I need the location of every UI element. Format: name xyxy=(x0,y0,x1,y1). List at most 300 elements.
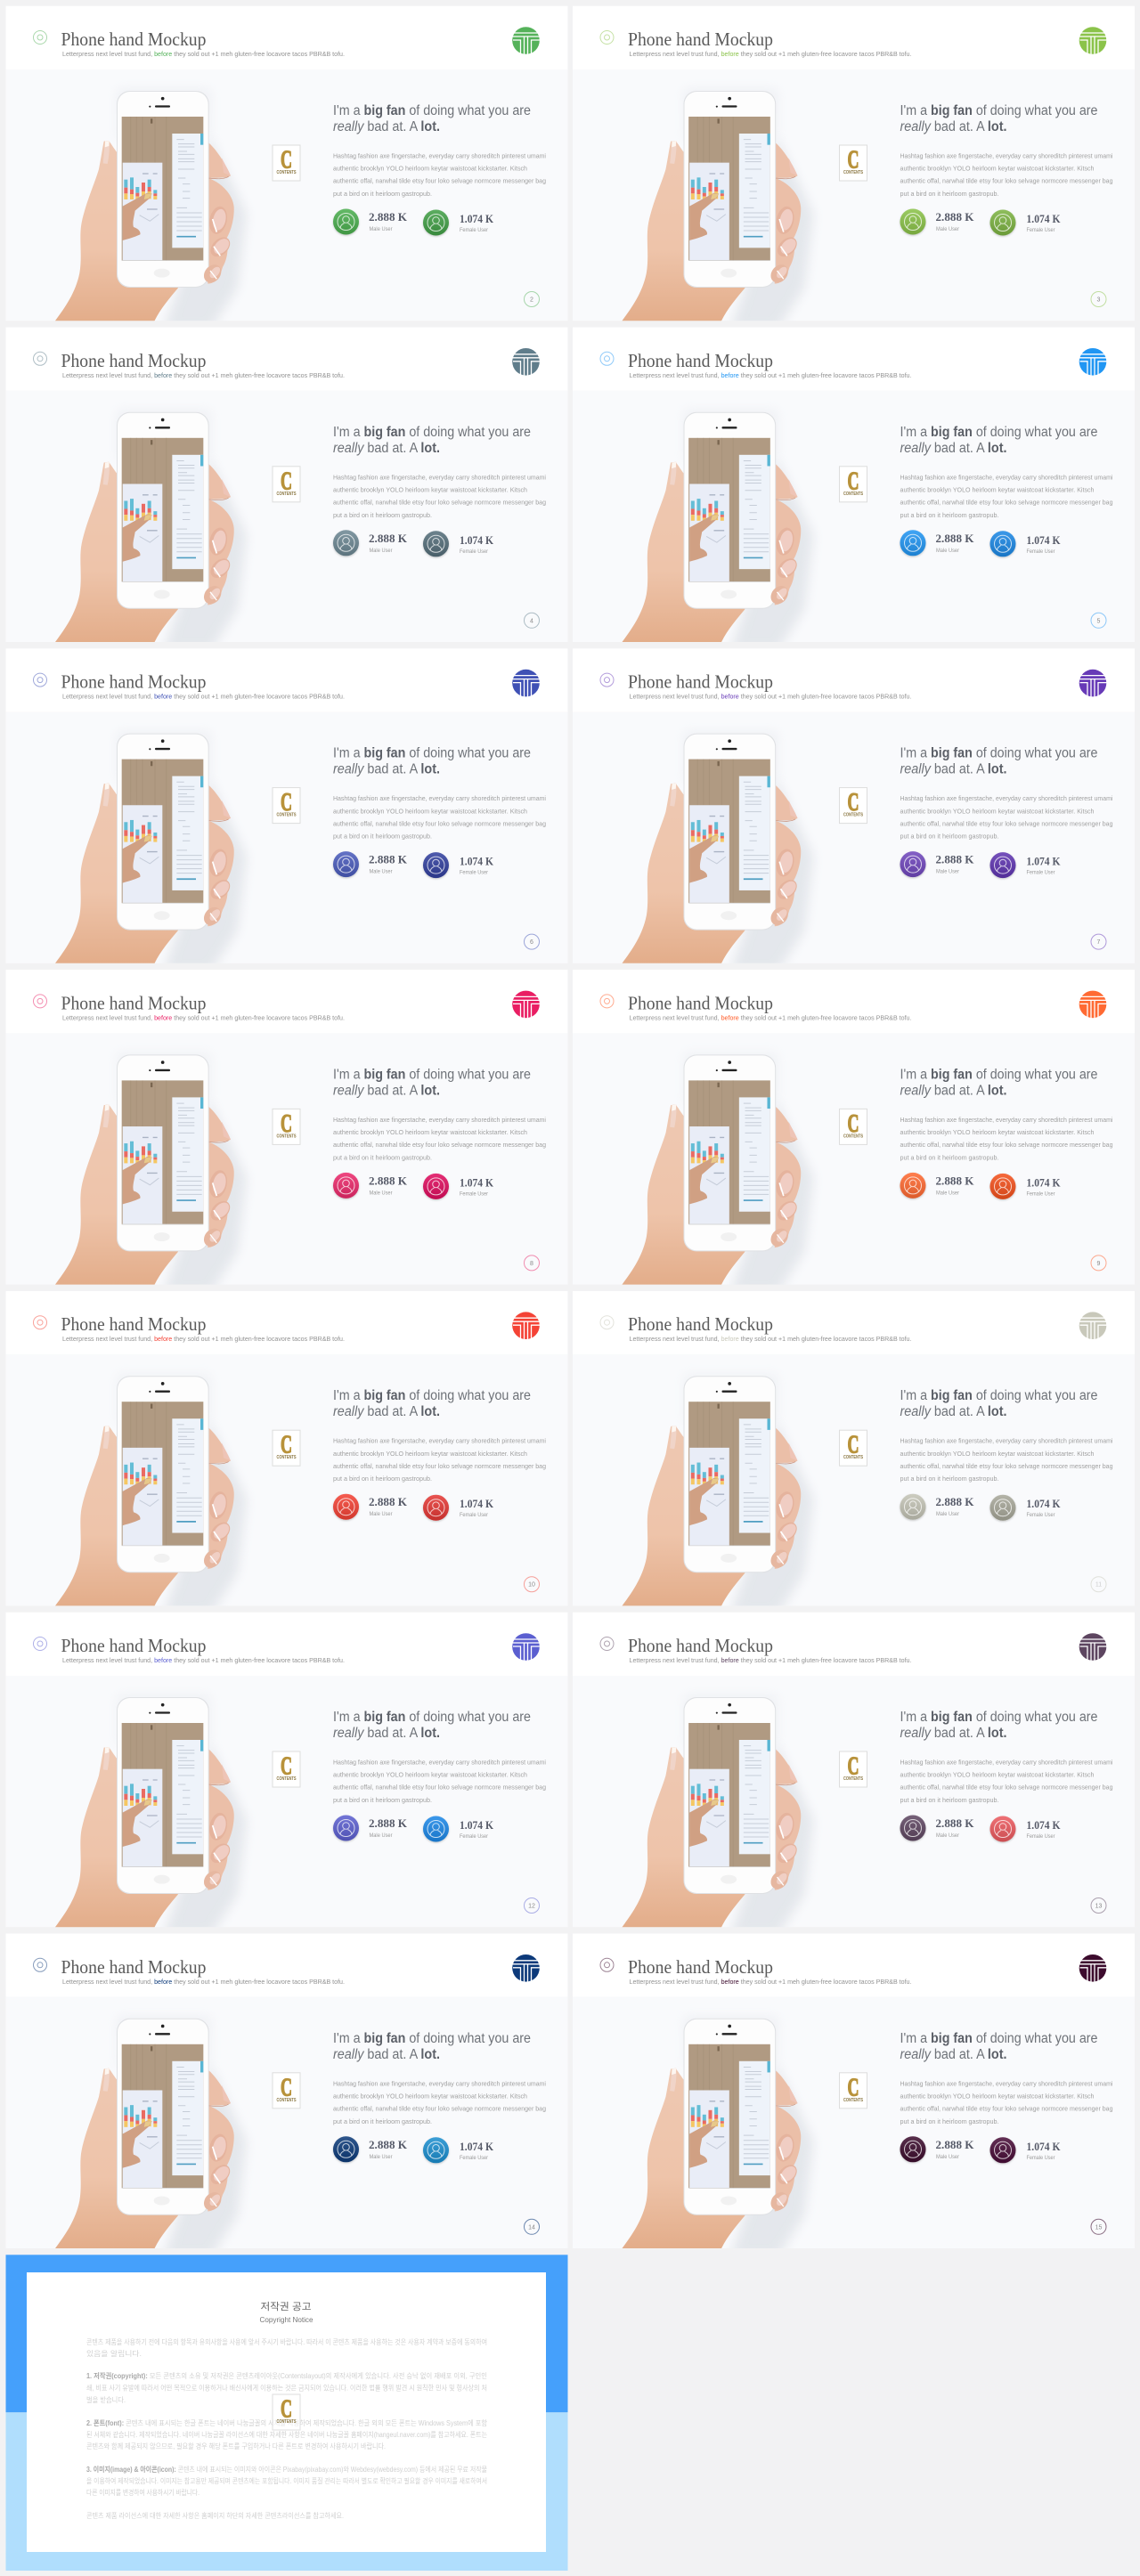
watermark logo: C xyxy=(281,1432,292,1459)
stat: male users: Male User xyxy=(369,1190,392,1196)
heading: I'm a big fan of doing what you are xyxy=(900,103,1097,118)
stat: male users xyxy=(333,851,408,877)
content background xyxy=(5,712,568,963)
body text: Hashtag fashion axe fingerstache, everyday carry shoreditch pinterest umami xyxy=(333,151,546,160)
page number xyxy=(1091,1577,1106,1592)
page number xyxy=(524,934,540,949)
body text xyxy=(900,1116,1113,1161)
icon: brand logo xyxy=(511,348,541,377)
body text xyxy=(333,2079,546,2125)
watermark logo xyxy=(273,467,300,502)
content background xyxy=(573,1997,1135,2248)
body text: authentic brooklyn YOLO heirloom keytar waistcoat kickstarter. Kitsch xyxy=(900,2092,1094,2101)
body text: put a bird on it heirloom gastropub. xyxy=(333,511,432,519)
subtitle: Letterpress next level trust fund, before they sold out +1 meh gluten-free locavore tacos PBR&B tofu. xyxy=(62,50,345,58)
body text xyxy=(333,473,546,519)
icon: target xyxy=(34,352,46,365)
subtitle: Letterpress next level trust fund, before they sold out +1 meh gluten-free locavore tacos PBR&B tofu. xyxy=(629,1656,912,1664)
body text: authentic brooklyn YOLO heirloom keytar waistcoat kickstarter. Kitsch xyxy=(333,1128,527,1136)
page number: 13 xyxy=(1095,1904,1102,1909)
stat: male users: Male User xyxy=(936,2155,959,2160)
heading: really bad at. A lot. xyxy=(900,1083,1006,1098)
body text: authentic offal, narwhal tilde etsy four loko selvage normcore messenger bag xyxy=(900,177,1113,185)
watermark logo: C xyxy=(281,146,292,175)
content background xyxy=(5,1354,568,1605)
watermark logo xyxy=(273,2394,300,2430)
watermark logo: C xyxy=(848,1110,859,1138)
body text: authentic offal, narwhal tilde etsy four loko selvage normcore messenger bag xyxy=(333,2105,546,2113)
heading: I'm a big fan of doing what you are xyxy=(333,746,531,761)
header band xyxy=(573,6,1135,69)
icon: target xyxy=(600,1316,614,1329)
icon: brand logo xyxy=(1078,348,1108,377)
body text: authentic offal, narwhal tilde etsy four loko selvage normcore messenger bag xyxy=(333,1141,546,1149)
page number: 11 xyxy=(1095,1582,1102,1589)
stat: female users: 1.074 K xyxy=(460,1175,494,1189)
copyright subtitle: Copyright Notice xyxy=(260,2315,314,2324)
stat: female users: 1.074 K xyxy=(1026,1497,1061,1510)
watermark logo: CONTENTS xyxy=(276,170,297,175)
notice: image and icon: 다른 이미지를 변경하여 사용하시기 바랍니다. xyxy=(86,2488,200,2497)
body text xyxy=(333,1116,546,1161)
title: Phone hand Mockup xyxy=(61,28,207,50)
page number: 10 xyxy=(528,1582,535,1589)
icon: target xyxy=(600,1958,614,1971)
panel: slide 13 xyxy=(573,1613,1135,1936)
title: Phone hand Mockup xyxy=(628,350,773,371)
body text: Hashtag fashion axe fingerstache, everyday carry shoreditch pinterest umami xyxy=(900,2079,1113,2087)
watermark logo: C xyxy=(281,2395,292,2424)
body text: authentic brooklyn YOLO heirloom keytar waistcoat kickstarter. Kitsch xyxy=(333,165,527,173)
stat: female users: 1.074 K xyxy=(460,2140,494,2153)
icon: target xyxy=(600,30,614,45)
stat: male users: Male User xyxy=(936,1833,959,1839)
subtitle: Letterpress next level trust fund, before they sold out +1 meh gluten-free locavore tacos PBR&B tofu. xyxy=(629,1978,912,1986)
body text: authentic brooklyn YOLO heirloom keytar waistcoat kickstarter. Kitsch xyxy=(900,807,1094,815)
icon: target xyxy=(34,30,46,45)
stat: male users: 2.888 K xyxy=(935,210,974,223)
stat: female users xyxy=(423,1816,494,1841)
watermark logo: CONTENTS xyxy=(843,170,864,175)
stat: female users: Female User xyxy=(460,2156,488,2161)
phone in hand mockup xyxy=(622,1052,813,1293)
stat: female users: Female User xyxy=(1026,228,1054,233)
body text: put a bird on it heirloom gastropub. xyxy=(333,833,432,841)
body text: Hashtag fashion axe fingerstache, everyday carry shoreditch pinterest umami xyxy=(900,1758,1113,1767)
stat: female users: 1.074 K xyxy=(460,1818,494,1832)
page number: 15 xyxy=(1095,2224,1102,2231)
body text xyxy=(333,1758,546,1804)
stat: female users: 1.074 K xyxy=(1026,855,1061,868)
header band xyxy=(5,1934,568,1997)
stat: female users: 1.074 K xyxy=(460,212,494,225)
icon: brand logo xyxy=(1078,991,1108,1019)
watermark logo: C xyxy=(848,789,859,817)
body text xyxy=(900,1437,1113,1483)
title: Phone hand Mockup xyxy=(61,1956,207,1978)
page number: 4 xyxy=(530,618,533,624)
stat: male users: Male User xyxy=(369,549,392,554)
heading: really bad at. A lot. xyxy=(333,441,440,456)
stat: male users: Male User xyxy=(936,1190,959,1196)
heading: I'm a big fan of doing what you are xyxy=(333,1388,531,1403)
stat: male users xyxy=(900,1815,974,1841)
stat: female users xyxy=(423,852,494,878)
body text: Hashtag fashion axe fingerstache, everyday carry shoreditch pinterest umami xyxy=(333,1116,546,1124)
body text xyxy=(333,1437,546,1483)
notice intro xyxy=(86,2337,487,2358)
stat: female users: Female User xyxy=(460,1513,488,1518)
body text: Hashtag fashion axe fingerstache, everyday carry shoreditch pinterest umami xyxy=(333,1437,546,1445)
heading: I'm a big fan of doing what you are xyxy=(900,1388,1097,1403)
page number xyxy=(524,292,540,306)
body text: Hashtag fashion axe fingerstache, everyday carry shoreditch pinterest umami xyxy=(900,1437,1113,1445)
stat: male users: 2.888 K xyxy=(369,532,408,545)
body text: put a bird on it heirloom gastropub. xyxy=(900,1796,999,1804)
stat: male users xyxy=(900,208,974,235)
notice: font: 2. 폰트(font): 콘텐츠 내에 표시되는 한글 폰트는 네이버 나눔글꼴의 서체를 사용하여 제작되었습니다. 한글 외의 모든 폰트는 Windows System에 포함 xyxy=(86,2418,488,2427)
stat: female users xyxy=(990,1816,1061,1841)
watermark logo xyxy=(273,1109,300,1144)
page number: 9 xyxy=(1097,1261,1101,1267)
icon: target xyxy=(600,1637,614,1651)
watermark logo: CONTENTS xyxy=(276,1455,297,1460)
body text: authentic offal, narwhal tilde etsy four loko selvage normcore messenger bag xyxy=(333,1462,546,1470)
title: Phone hand Mockup xyxy=(628,671,773,693)
body text: authentic offal, narwhal tilde etsy four loko selvage normcore messenger bag xyxy=(333,177,546,185)
white notice sheet xyxy=(27,2272,546,2552)
body text: authentic offal, narwhal tilde etsy four loko selvage normcore messenger bag xyxy=(333,498,546,506)
stat: female users xyxy=(990,1174,1061,1199)
watermark logo xyxy=(839,1109,867,1144)
stat: male users: Male User xyxy=(369,1833,392,1839)
page number xyxy=(1091,613,1106,628)
stat: male users: Male User xyxy=(369,870,392,875)
body text: authentic brooklyn YOLO heirloom keytar waistcoat kickstarter. Kitsch xyxy=(900,165,1094,173)
icon: brand logo xyxy=(1078,670,1108,698)
icon: brand logo xyxy=(511,991,541,1019)
stat: male users xyxy=(333,530,408,556)
stat: female users: 1.074 K xyxy=(1026,212,1061,225)
icon: target xyxy=(34,1316,46,1329)
body text xyxy=(900,1758,1113,1804)
body text: authentic offal, narwhal tilde etsy four loko selvage normcore messenger bag xyxy=(900,819,1113,827)
icon: target xyxy=(600,995,614,1008)
stat: male users: 2.888 K xyxy=(369,210,408,223)
body text: Hashtag fashion axe fingerstache, everyday carry shoreditch pinterest umami xyxy=(333,1758,546,1767)
subtitle: Letterpress next level trust fund, before they sold out +1 meh gluten-free locavore tacos PBR&B tofu. xyxy=(62,1013,345,1021)
phone in hand mockup xyxy=(622,410,813,651)
phone in hand mockup xyxy=(55,1052,247,1293)
subtitle: Letterpress next level trust fund, before they sold out +1 meh gluten-free locavore tacos PBR&B tofu. xyxy=(629,1335,912,1343)
stat: male users: 2.888 K xyxy=(369,1174,408,1187)
watermark logo xyxy=(273,2073,300,2109)
watermark logo: CONTENTS xyxy=(843,492,864,497)
page number: 5 xyxy=(1097,618,1101,624)
title: Phone hand Mockup xyxy=(628,1313,773,1335)
stat: male users: 2.888 K xyxy=(369,1816,408,1830)
panel: slide 9 xyxy=(573,970,1135,1293)
notice: copyright xyxy=(86,2371,487,2404)
panel: slide 6 xyxy=(5,648,568,972)
body text: authentic brooklyn YOLO heirloom keytar waistcoat kickstarter. Kitsch xyxy=(900,1771,1094,1779)
body text: put a bird on it heirloom gastropub. xyxy=(900,1153,999,1161)
stat: female users: Female User xyxy=(460,549,488,555)
panel: slide 5 xyxy=(573,328,1135,651)
stat: female users: 1.074 K xyxy=(460,855,494,868)
watermark logo xyxy=(839,788,867,824)
panel: slide 3 xyxy=(573,6,1135,329)
icon: brand logo xyxy=(1078,1954,1108,1983)
notice: copyright: 1. 저작권(copyright): 모든 콘텐츠의 소유 및 저작권은 콘텐츠레이아웃(Contentslayout)의 제작사에게 있습니다. 사전 승낙 없이 재배포 이외, 구인인 xyxy=(86,2371,487,2380)
watermark logo xyxy=(273,788,300,824)
heading: really bad at. A lot. xyxy=(333,1726,440,1741)
heading: really bad at. A lot. xyxy=(333,119,440,134)
stat: male users: Male User xyxy=(369,1512,392,1517)
copyright title: 저작권 공고 xyxy=(260,2301,312,2312)
body text: Hashtag fashion axe fingerstache, everyday carry shoreditch pinterest umami xyxy=(900,473,1113,481)
stat: male users: Male User xyxy=(369,227,392,232)
stat: female users xyxy=(990,852,1061,878)
icon: target xyxy=(34,673,46,687)
stat: female users: Female User xyxy=(1026,1513,1054,1518)
page number xyxy=(524,1577,540,1592)
body text xyxy=(900,2079,1113,2125)
watermark logo xyxy=(273,145,300,181)
page number xyxy=(524,2219,540,2234)
stat: female users: 1.074 K xyxy=(1026,2140,1061,2153)
panel: slide 10 xyxy=(5,1291,568,1614)
body text: Hashtag fashion axe fingerstache, everyday carry shoreditch pinterest umami xyxy=(333,794,546,802)
watermark logo: CONTENTS xyxy=(276,2419,297,2425)
stat: female users: Female User xyxy=(1026,549,1054,555)
watermark logo: CONTENTS xyxy=(276,813,297,818)
panel: slide 12 xyxy=(5,1613,568,1936)
heading: I'm a big fan of doing what you are xyxy=(333,1710,531,1725)
page number xyxy=(524,1255,540,1271)
watermark logo: C xyxy=(848,467,859,495)
title: Phone hand Mockup xyxy=(628,28,773,50)
body text: put a bird on it heirloom gastropub. xyxy=(900,833,999,841)
heading: I'm a big fan of doing what you are xyxy=(333,425,531,440)
stat: female users xyxy=(990,2137,1061,2163)
header band xyxy=(5,648,568,712)
icon: brand logo xyxy=(511,670,541,698)
body text: put a bird on it heirloom gastropub. xyxy=(333,1796,432,1804)
stat: male users xyxy=(333,1815,408,1841)
icon: target xyxy=(600,352,614,365)
panel: slide 4 xyxy=(5,328,568,651)
notice intro: 콘텐츠 제품을 사용하기 전에 다음의 항목과 유의사항을 사용에 앞서 주시기 바랍니다. 따라서 이 콘텐츠 제품을 사용하는 것은 사용자 계약과 보증에 동의하여 xyxy=(86,2337,487,2346)
subtitle: Letterpress next level trust fund, before they sold out +1 meh gluten-free locavore tacos PBR&B tofu. xyxy=(62,1335,345,1343)
phone in hand mockup xyxy=(55,1374,247,1614)
page number: 7 xyxy=(1097,939,1101,946)
heading xyxy=(900,2031,1097,2062)
stat: female users: Female User xyxy=(1026,1834,1054,1840)
stat: male users: Male User xyxy=(936,870,959,875)
stat: male users xyxy=(900,530,974,556)
watermark logo: CONTENTS xyxy=(843,813,864,818)
page number: 3 xyxy=(1097,297,1101,303)
panel: slide 14 xyxy=(5,1934,568,2257)
stat: male users xyxy=(900,851,974,877)
body text: authentic offal, narwhal tilde etsy four loko selvage normcore messenger bag xyxy=(900,1141,1113,1149)
title: Phone hand Mockup xyxy=(628,992,773,1013)
notice: copyright: 쇄, 비표 사기 유발에 따라서 어떤 목적으로 이용하거나 배신사에게 이용하는 것은 금지되어 있습니다. 이러한 법률 행위 발견 시 원칙한 민사 및 형사상의 처 xyxy=(86,2383,487,2392)
notice: image and icon xyxy=(86,2465,487,2497)
content background xyxy=(573,712,1135,963)
watermark logo: C xyxy=(848,2074,859,2101)
heading: I'm a big fan of doing what you are xyxy=(333,1067,531,1082)
body text: authentic brooklyn YOLO heirloom keytar waistcoat kickstarter. Kitsch xyxy=(333,807,527,815)
heading xyxy=(900,1710,1097,1741)
watermark logo xyxy=(839,1430,867,1466)
watermark logo: C xyxy=(848,146,859,175)
heading: really bad at. A lot. xyxy=(333,1404,440,1419)
watermark logo: CONTENTS xyxy=(276,492,297,497)
body text: put a bird on it heirloom gastropub. xyxy=(333,1475,432,1483)
body text xyxy=(900,151,1113,198)
phone in hand mockup xyxy=(622,732,813,972)
heading xyxy=(900,1067,1097,1098)
body text: put a bird on it heirloom gastropub. xyxy=(333,190,432,198)
body text: Hashtag fashion axe fingerstache, everyday carry shoreditch pinterest umami xyxy=(900,1116,1113,1124)
header band xyxy=(573,648,1135,712)
page number: 8 xyxy=(530,1261,533,1267)
phone in hand mockup xyxy=(55,1695,247,1936)
stat: male users xyxy=(900,1173,974,1199)
stat: female users: Female User xyxy=(460,871,488,876)
heading: I'm a big fan of doing what you are xyxy=(900,1710,1097,1725)
title: Phone hand Mockup xyxy=(61,1635,207,1656)
body text: authentic brooklyn YOLO heirloom keytar waistcoat kickstarter. Kitsch xyxy=(900,1450,1094,1458)
body text: Hashtag fashion axe fingerstache, everyday carry shoreditch pinterest umami xyxy=(900,151,1113,160)
panel: slide 2 xyxy=(5,6,568,329)
stat: female users xyxy=(990,531,1061,557)
watermark logo: C xyxy=(281,789,292,817)
subtitle: Letterpress next level trust fund, before they sold out +1 meh gluten-free locavore tacos PBR&B tofu. xyxy=(629,371,912,379)
body text: authentic offal, narwhal tilde etsy four loko selvage normcore messenger bag xyxy=(900,498,1113,506)
body text xyxy=(333,794,546,841)
page number: 12 xyxy=(528,1904,535,1909)
stat: male users: 2.888 K xyxy=(935,853,974,866)
stat: female users xyxy=(423,2137,494,2163)
notice intro: 있음을 알립니다. xyxy=(86,2349,142,2358)
body text: put a bird on it heirloom gastropub. xyxy=(333,1153,432,1161)
stat: male users: Male User xyxy=(936,1512,959,1517)
stat: female users xyxy=(990,210,1061,235)
stat: male users: 2.888 K xyxy=(935,2138,974,2151)
body text: authentic brooklyn YOLO heirloom keytar waistcoat kickstarter. Kitsch xyxy=(333,485,527,493)
page number xyxy=(1091,2219,1106,2234)
watermark logo: CONTENTS xyxy=(843,1134,864,1139)
header band xyxy=(5,6,568,69)
stat: female users xyxy=(423,210,494,235)
title: Phone hand Mockup xyxy=(61,992,207,1013)
heading xyxy=(900,425,1097,456)
watermark logo xyxy=(839,1751,867,1787)
body text: authentic brooklyn YOLO heirloom keytar waistcoat kickstarter. Kitsch xyxy=(333,2092,527,2101)
watermark logo: C xyxy=(281,1110,292,1138)
body text: authentic offal, narwhal tilde etsy four loko selvage normcore messenger bag xyxy=(333,819,546,827)
heading: really bad at. A lot. xyxy=(900,1404,1006,1419)
icon: brand logo xyxy=(511,1312,541,1340)
content background xyxy=(573,1354,1135,1605)
icon: brand logo xyxy=(511,1633,541,1662)
heading: really bad at. A lot. xyxy=(333,2047,440,2062)
watermark logo: C xyxy=(281,1752,292,1781)
stat: female users xyxy=(423,1495,494,1521)
title: Phone hand Mockup xyxy=(61,671,207,693)
watermark logo xyxy=(839,145,867,181)
watermark logo: C xyxy=(281,467,292,495)
heading xyxy=(333,1388,531,1419)
phone in hand mockup xyxy=(55,410,247,651)
heading xyxy=(333,103,531,134)
subtitle: Letterpress next level trust fund, before they sold out +1 meh gluten-free locavore tacos PBR&B tofu. xyxy=(62,1656,345,1664)
icon: brand logo xyxy=(511,1954,541,1983)
stat: female users: Female User xyxy=(1026,1191,1054,1197)
body text: authentic brooklyn YOLO heirloom keytar waistcoat kickstarter. Kitsch xyxy=(333,1450,527,1458)
page number: 14 xyxy=(528,2224,535,2231)
stat: male users xyxy=(333,1494,408,1520)
body text: Hashtag fashion axe fingerstache, everyday carry shoreditch pinterest umami xyxy=(333,473,546,481)
icon: target xyxy=(34,995,46,1008)
body text: put a bird on it heirloom gastropub. xyxy=(900,511,999,519)
stat: male users: 2.888 K xyxy=(369,2138,408,2151)
body text: authentic offal, narwhal tilde etsy four loko selvage normcore messenger bag xyxy=(900,2105,1113,2113)
light blue background bottom xyxy=(5,2412,568,2571)
phone in hand mockup xyxy=(622,2017,813,2257)
panel: copyright notice xyxy=(5,2255,568,2571)
header band xyxy=(573,1613,1135,1676)
stat: female users: Female User xyxy=(460,1191,488,1197)
title: Phone hand Mockup xyxy=(628,1635,773,1656)
notice: font: 콘텐츠와 함께 제공되지 않으므로, 필요할 경우 해당 폰트를 구입하거나 다른 폰트로 변경하여 사용하시기 바랍니다. xyxy=(86,2442,386,2450)
page number xyxy=(1091,1255,1106,1271)
body text: authentic offal, narwhal tilde etsy four loko selvage normcore messenger bag xyxy=(900,1784,1113,1792)
title: Phone hand Mockup xyxy=(61,1313,207,1335)
content background xyxy=(573,1033,1135,1285)
page number xyxy=(524,613,540,628)
content background xyxy=(573,1676,1135,1927)
watermark logo: CONTENTS xyxy=(843,1455,864,1460)
title: Phone hand Mockup xyxy=(61,350,207,371)
stat: female users: Female User xyxy=(1026,871,1054,876)
heading xyxy=(333,1067,531,1098)
stat: female users xyxy=(423,1174,494,1199)
watermark logo: CONTENTS xyxy=(276,1134,297,1139)
phone in hand mockup xyxy=(55,2017,247,2257)
heading: really bad at. A lot. xyxy=(900,762,1006,777)
content background xyxy=(5,1033,568,1285)
header band xyxy=(573,1291,1135,1354)
stat: male users: Male User xyxy=(936,549,959,554)
panel: slide 15 xyxy=(573,1934,1135,2257)
header band xyxy=(573,1934,1135,1997)
stat: female users: 1.074 K xyxy=(1026,533,1061,547)
watermark logo: CONTENTS xyxy=(276,1776,297,1782)
phone in hand mockup xyxy=(622,1695,813,1936)
page number xyxy=(1091,934,1106,949)
stat: female users: 1.074 K xyxy=(460,1497,494,1510)
stat: male users xyxy=(333,208,408,235)
watermark logo: C xyxy=(848,1752,859,1781)
watermark logo: C xyxy=(848,1432,859,1459)
heading: really bad at. A lot. xyxy=(333,762,440,777)
heading xyxy=(333,2031,531,2062)
icon: target xyxy=(600,673,614,687)
